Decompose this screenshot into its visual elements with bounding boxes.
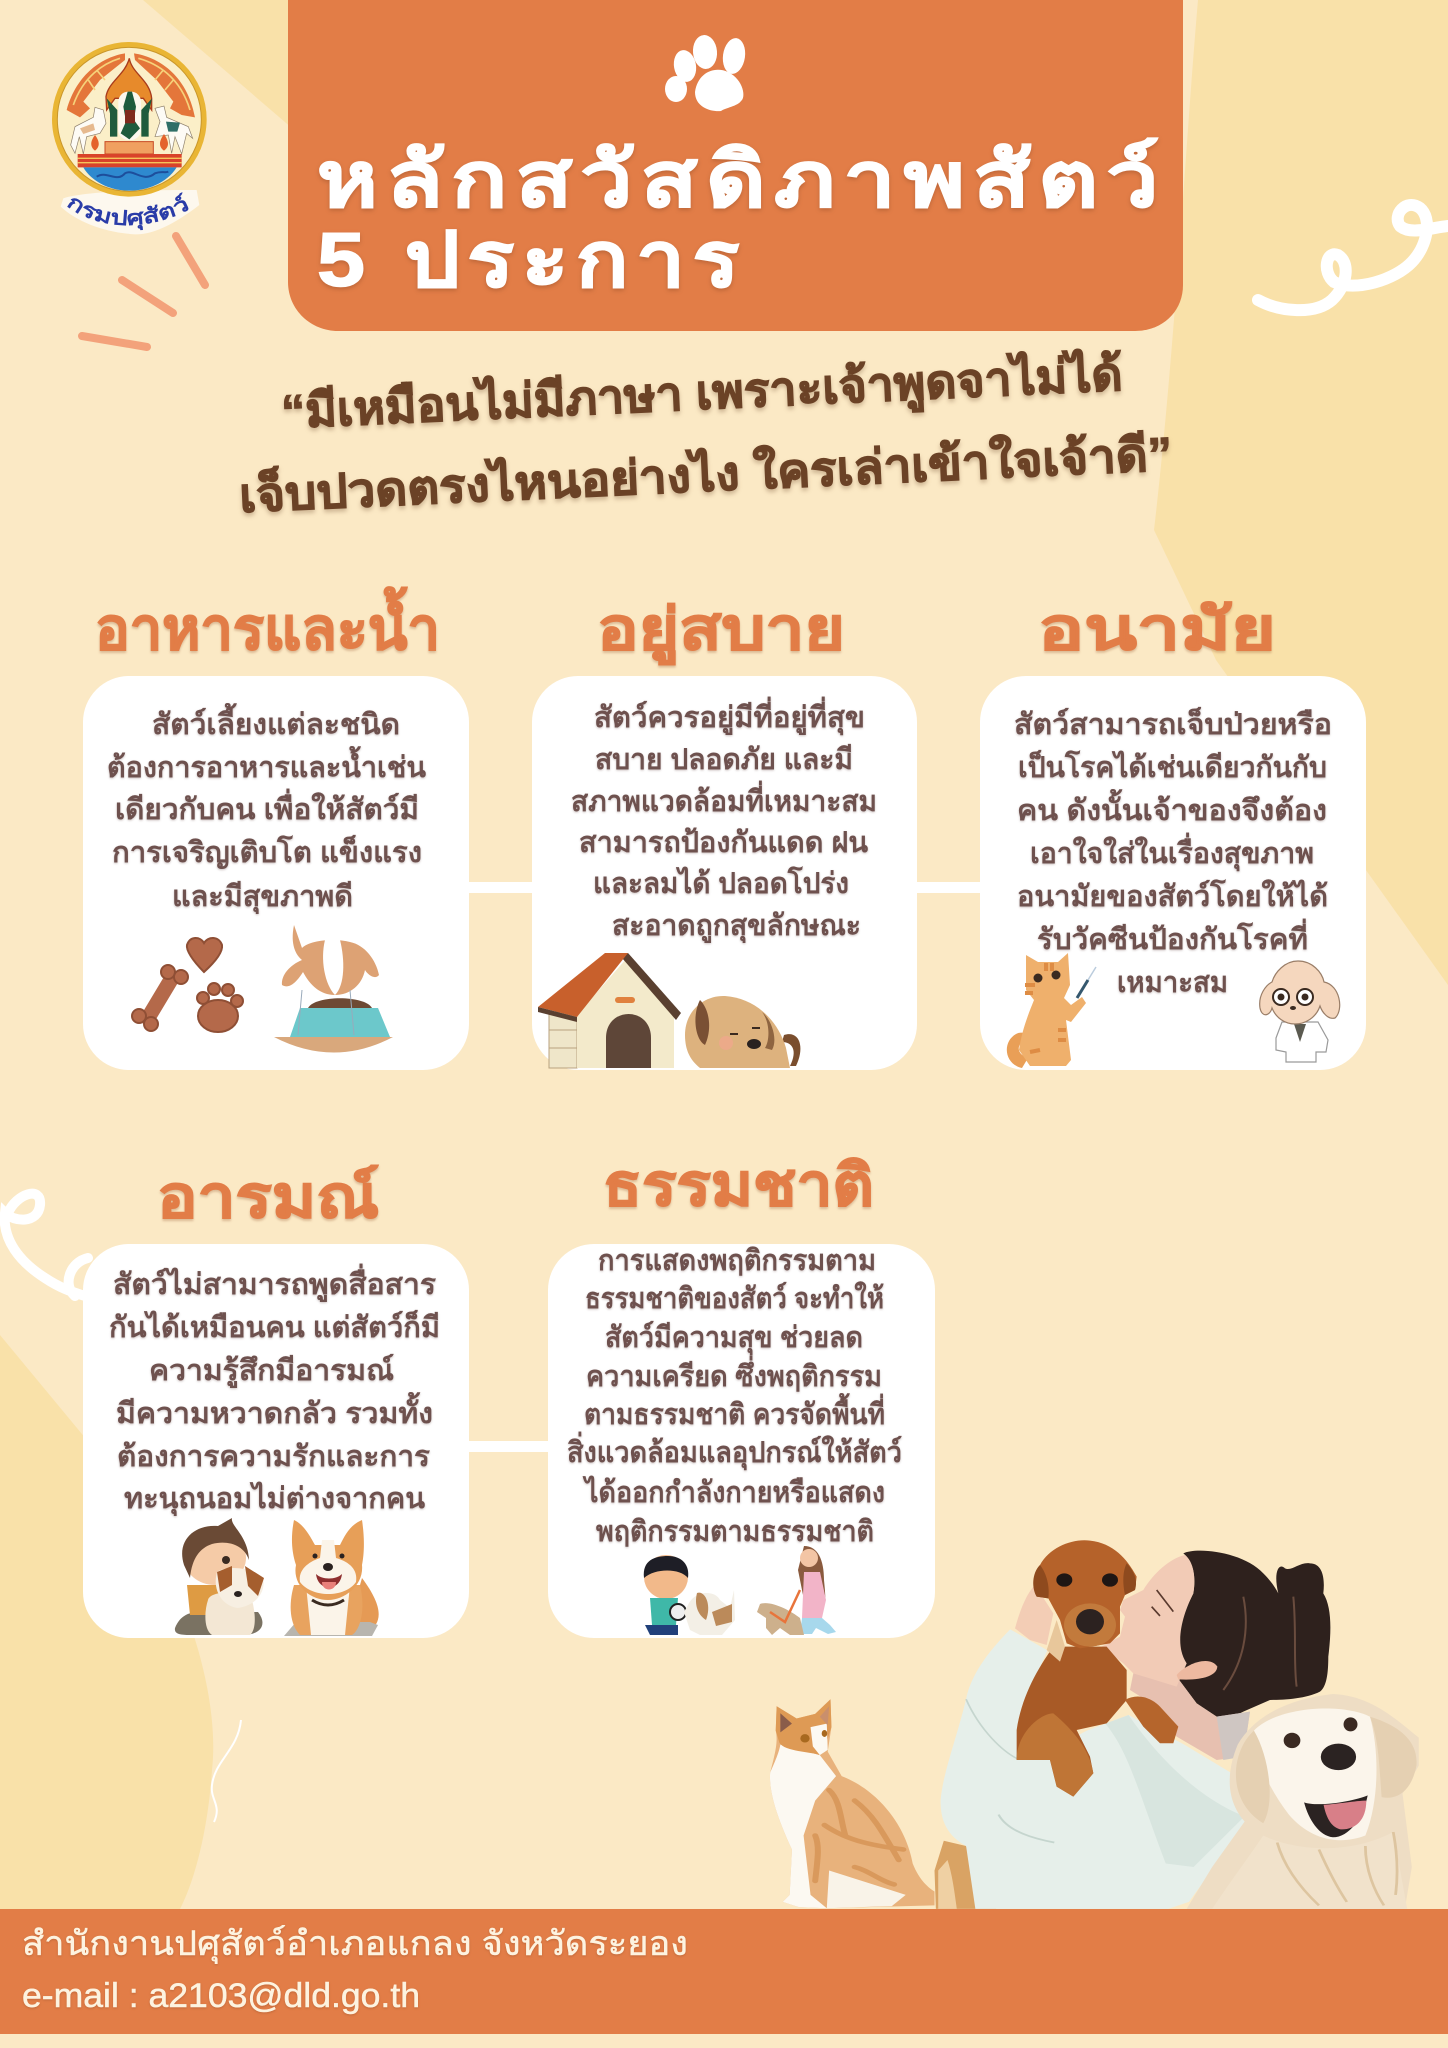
- text block: สัตว์สามารถเจ็บป่วยหรือ: [1014, 706, 1332, 741]
- quote: เจ็บปวดตรงไหนอย่างไง ใครเล่าเข้าใจเจ้าดี”: [238, 424, 1173, 522]
- hair: [1175, 1551, 1330, 1717]
- title banner: [288, 0, 1183, 331]
- text block: [571, 696, 877, 943]
- face: [1102, 1555, 1194, 1687]
- text block: ต้องการความรักและการ: [117, 1441, 430, 1473]
- icon: dog eating from bowl: [274, 925, 393, 1052]
- text block: เอาใจใส่ในเรื่องสุขภาพ: [1030, 832, 1314, 871]
- neck: [1130, 1673, 1250, 1760]
- icon: cat with syringe: [1007, 953, 1096, 1068]
- quote: [238, 346, 1173, 522]
- ornament wings: [67, 53, 195, 117]
- text block: สภาพแวดล้อมที่เหมาะสม: [571, 780, 877, 818]
- footer text: e-mail : a2103@dld.go.th: [22, 1977, 420, 2015]
- photo: golden retriever: [1187, 1694, 1419, 1909]
- text block: เดียวกับคน เพื่อให้สัตว์มี: [115, 788, 419, 826]
- text block: การเจริญเติบโต แข็งแรง: [112, 834, 422, 870]
- heading: comfort: อยู่สบาย: [597, 597, 845, 665]
- text block: กันได้เหมือนคน แต่สัตว์ก็มี: [109, 1309, 440, 1344]
- title text: [317, 138, 1167, 303]
- text block: มีความหวาดกลัว รวมทั้ง: [116, 1391, 433, 1430]
- text block: [567, 1245, 902, 1548]
- dog body: [1017, 1647, 1127, 1797]
- text block: รับวัคซีนป้องกันโรคที่: [1037, 918, 1308, 956]
- footer text: [22, 1925, 688, 2015]
- text block: สัตว์ควรอยู่มีที่อยู่ที่สุข: [594, 696, 865, 735]
- squiggle: left: [5, 1194, 88, 1296]
- text block: สะอาดถูกสุขลักษณะ: [612, 910, 861, 943]
- text block: สัตว์เลี้ยงแต่ละชนิด: [152, 702, 400, 741]
- text block: ต้องการอาหารและน้ำเช่น: [107, 745, 426, 784]
- text block: และลมได้ ปลอดโปร่ง: [593, 865, 849, 900]
- icon: girl walking dog: [757, 1546, 836, 1635]
- text block: ได้ออกกำลังกายหรือแสดง: [582, 1475, 885, 1509]
- panel: hygiene: [980, 676, 1366, 1070]
- icon: paw print: [665, 34, 747, 111]
- text block: สามารถป้องกันแดด ฝน: [579, 827, 868, 859]
- text block: ตามธรรมชาติ ควรจัดพื้นที่: [584, 1392, 885, 1431]
- text block: [109, 1263, 440, 1516]
- text block: ทะนุถนอมไม่ต่างจากคน: [124, 1481, 425, 1516]
- horses: [71, 107, 106, 154]
- icon: boy hugging puppy: [175, 1518, 264, 1635]
- quote: “มีเหมือนไม่มีภาษา เพราะเจ้าพูดจาไม่ได้: [280, 346, 1124, 442]
- text block: เหมาะสม: [1117, 967, 1228, 999]
- text block: ความเครียด ซึ่งพฤติกรรม: [586, 1355, 882, 1393]
- heading: hygiene: อนามัย: [1038, 597, 1276, 662]
- dog head: [1034, 1540, 1137, 1648]
- title text: 5 ประการ: [317, 218, 747, 303]
- accent dashes: [82, 236, 205, 347]
- icon: dog doctor: [1260, 961, 1340, 1062]
- text block: [107, 702, 426, 914]
- squiggle: top right: [1258, 205, 1448, 310]
- text block: สิ่งแวดล้อมแลอุปกรณ์ให้สัตว์: [567, 1431, 902, 1470]
- panel: comfort: [532, 676, 917, 1070]
- logo: department emblem: [52, 42, 207, 234]
- heading: emotion: อารมณ์: [157, 1164, 379, 1230]
- squiggle: thin line: [212, 1720, 241, 1822]
- photo: dog behind woman: [935, 1841, 996, 1909]
- text block: คน ดังนั้นเจ้าของจึงต้อง: [1017, 788, 1327, 827]
- text block: [1014, 706, 1332, 999]
- text block: การแสดงพฤติกรรมตาม: [598, 1245, 876, 1277]
- photo: woman's head and dog: [1015, 1540, 1330, 1797]
- icon: sleeping dog: [685, 996, 800, 1068]
- text block: ความรู้สึกมีอารมณ์: [149, 1353, 394, 1388]
- footer text: สำนักงานปศุสัตว์อำเภอแกลง จังหวัดระยอง: [22, 1925, 688, 1964]
- text block: พฤติกรรมตามธรรมชาติ: [596, 1516, 874, 1548]
- photo: cat: [770, 1699, 935, 1908]
- icon: treats: [132, 938, 243, 1032]
- connectors: [460, 882, 988, 1452]
- hand: [1015, 1585, 1053, 1645]
- text block: สัตว์มีความสุข ช่วยลด: [605, 1320, 863, 1355]
- text block: เป็นโรคได้เช่นเดียวกันกับ: [1018, 749, 1327, 784]
- heading: nature: ธรรมชาติ: [603, 1153, 874, 1218]
- panel: nature: [548, 1244, 935, 1638]
- footer band: [0, 1909, 1448, 2034]
- title text: หลักสวัสดิภาพสัตว์: [317, 138, 1167, 223]
- panel: emotion: [83, 1244, 469, 1638]
- base and water: [105, 142, 153, 154]
- text block: ธรรมชาติของสัตว์ จะทำให้: [585, 1281, 884, 1315]
- heading: food and water: อาหารและน้ำ: [95, 587, 440, 662]
- department name: กรมปศุสัตว์: [67, 192, 188, 230]
- icon: corgi: [284, 1520, 379, 1636]
- text block: อนามัยของสัตว์โดยให้ได้: [1017, 878, 1328, 913]
- photo: woman hoodie: [941, 1629, 1247, 1909]
- icon: boy playing with dog: [644, 1555, 735, 1635]
- icon: dog house: [538, 953, 681, 1068]
- shrine: [106, 58, 152, 110]
- text block: และมีสุขภาพดี: [172, 881, 353, 914]
- text block: สัตว์ไม่สามารถพูดสื่อสาร: [113, 1263, 436, 1302]
- text block: สบาย ปลอดภัย และมี: [595, 744, 853, 776]
- panel: food and water: [83, 676, 469, 1070]
